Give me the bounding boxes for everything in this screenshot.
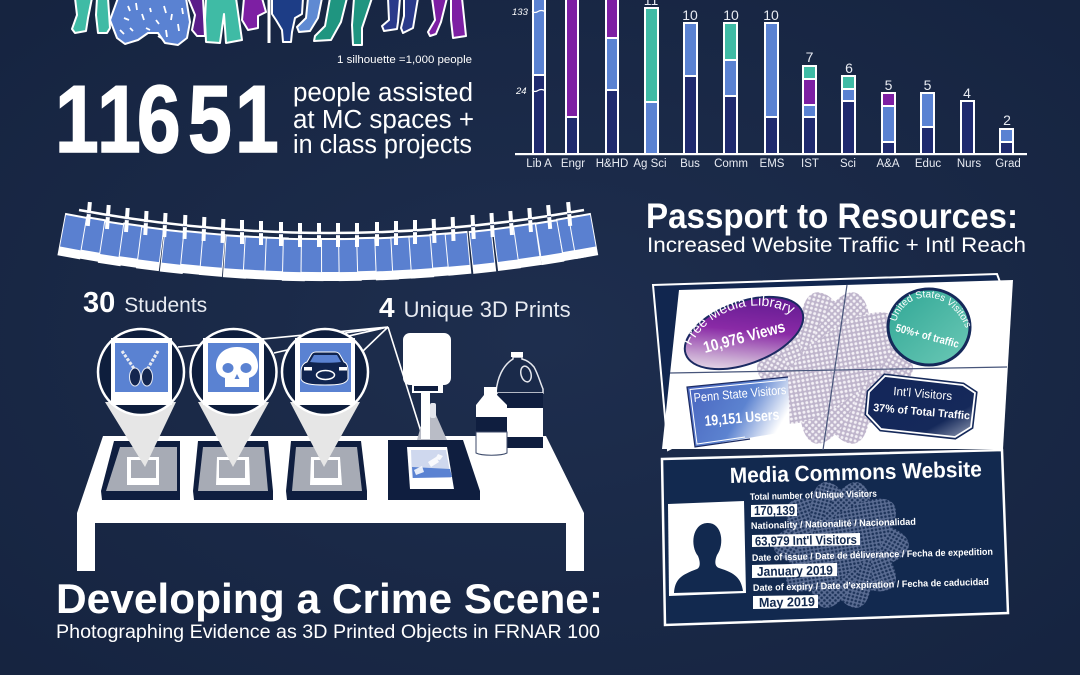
bar: Nurs: [961, 101, 974, 154]
side knob: [430, 403, 436, 418]
field: date of expiry: [753, 577, 989, 610]
field: date of expiry: May 2019: [759, 594, 815, 610]
bar: H&HD: [606, 0, 618, 154]
value labels: 7: [806, 49, 814, 65]
resin jug: [496, 352, 543, 448]
value labels: 2: [1003, 112, 1011, 128]
category labels: Grad: [995, 158, 1021, 170]
guilloche pattern lower: [771, 476, 911, 614]
identity page: [662, 450, 1008, 625]
silhouette: person with cane: [269, 0, 303, 43]
table top and legs: [77, 436, 584, 571]
30 students label: 30 Students: [83, 287, 207, 319]
chemical bottle: [476, 387, 507, 455]
icon: skull: [216, 347, 258, 387]
fold lines: [670, 285, 1007, 450]
rope: [79, 210, 584, 233]
category labels: EMS: [760, 158, 785, 170]
upper page: [662, 280, 1013, 449]
sticker: united states visitors: [886, 288, 972, 366]
silhouette: light blue leg: [297, 0, 322, 32]
bar: Sci: [842, 76, 855, 154]
field: date of issue: January 2019: [757, 563, 833, 579]
break values: 133: [512, 7, 529, 18]
bar: Engr: [566, 0, 578, 154]
tray 1: [101, 441, 180, 500]
magnifier: car: [282, 329, 368, 467]
category labels: Educ: [915, 158, 941, 170]
passport subheading: Increased Website Traffic + Intl Reach: [647, 234, 1026, 257]
field: unique visitors: [750, 489, 877, 518]
silhouettes of people: [72, 0, 466, 45]
light beam: [417, 415, 447, 440]
bar: Ag Sci: [645, 8, 658, 154]
value labels: [644, 0, 1011, 128]
sticker: international visitors: 37% of Total Traffic: [873, 402, 970, 422]
clothespins: [86, 202, 572, 247]
value labels: 10: [763, 7, 779, 23]
value labels: 5: [924, 77, 932, 93]
tray 2: [193, 441, 273, 500]
field: nationality: [751, 517, 916, 548]
category labels: Lib A: [526, 158, 552, 170]
stacked bar chart by college: [512, 0, 1027, 170]
passport heading: Passport to Resources:: [646, 197, 1018, 236]
field: nationality: 63,979 Int'l Visitors: [755, 533, 857, 548]
field: date of issue: Date of issue / Date de déliverance / Fecha de expedition: [752, 547, 993, 564]
bar: A&A: [882, 93, 895, 154]
print head: [412, 384, 443, 393]
value labels: 10: [723, 7, 739, 23]
icon: car: [301, 352, 348, 385]
passport illustration: [652, 273, 1013, 626]
silhouette: purple figure partly hidden: [188, 0, 205, 36]
sticker: penn state visitors: 19,151 Users: [704, 407, 780, 430]
value labels: 4: [963, 85, 971, 101]
category labels: Engr: [561, 158, 585, 170]
page title: Media Commons Website: [729, 456, 982, 488]
icon: dog tags: [122, 351, 158, 386]
photos: [57, 213, 598, 281]
magnifier: skull: [190, 329, 276, 467]
category labels: [526, 158, 1021, 170]
sticker: united states visitors: 50%+ of traffic: [894, 322, 960, 351]
guilloche pattern upper: [755, 285, 915, 451]
field: unique visitors: 170,139: [754, 504, 795, 518]
sticker: free media library: [684, 296, 804, 370]
sticker: free media library: 10,976 Views: [702, 319, 787, 357]
sticker: international visitors: [867, 376, 975, 437]
bar: EMS: [765, 23, 778, 154]
bar: IST: [803, 66, 816, 154]
value labels: 6: [845, 60, 853, 76]
category labels: Comm: [714, 158, 748, 170]
category labels: Ag Sci: [633, 158, 667, 170]
field: nationality: Nationality / Nationalité / Nacionalidad: [751, 517, 916, 532]
category labels: IST: [801, 158, 819, 170]
break values: [512, 7, 529, 97]
sticker: united states visitors: United States Visitors: [890, 290, 970, 328]
sticker: penn state visitors: Penn State Visitors: [693, 383, 787, 405]
field: date of issue: [752, 547, 993, 579]
tray 4 with print in progress: [388, 440, 480, 500]
crime scene heading: Developing a Crime Scene:: [56, 575, 603, 622]
value labels: 10: [682, 7, 698, 23]
printer body: [403, 333, 451, 385]
scale note: 1 silhouette =1,000 people: [337, 54, 472, 66]
people assisted description: [293, 79, 474, 159]
value labels: 5: [885, 77, 893, 93]
big number 11651: 11651: [55, 66, 279, 173]
field: unique visitors: Total number of Unique Visitors: [750, 489, 877, 503]
silhouette: wheelchair user: [110, 0, 190, 45]
category labels: Sci: [840, 158, 856, 170]
category labels: H&HD: [596, 158, 628, 170]
axis line: [515, 153, 1027, 155]
table with trays: [77, 436, 584, 571]
bar: Grad: [1000, 129, 1013, 154]
silhouette: purple boots: [428, 0, 466, 38]
4 unique 3D prints label: 4 Unique 3D Prints: [379, 292, 571, 323]
sticker: international visitors: Int'l Visitors: [893, 384, 953, 403]
silhouette: navy legs: [382, 0, 418, 33]
bar: Educ: [921, 93, 934, 154]
category labels: Bus: [680, 158, 700, 170]
passport cover: [653, 274, 1000, 450]
crime scene subheading: Photographing Evidence as 3D Printed Objects in FRNAR 100: [56, 622, 600, 643]
people assisted description: at MC spaces +: [293, 106, 474, 134]
break values: 24: [515, 86, 527, 97]
silhouette: green striding legs: [314, 0, 372, 45]
3D printer: [403, 333, 451, 440]
people assisted description: people assisted: [293, 79, 473, 107]
axis break marks: [532, 10, 545, 92]
silhouette: teal legs: [72, 0, 110, 33]
silhouette: purple skirt: [242, 0, 266, 30]
stem: [421, 392, 430, 439]
clothesline of student photos: [57, 202, 598, 281]
field: date of expiry: Date of expiry / Date d'expiration / Fecha de caducidad: [753, 577, 989, 594]
silhouette: teal trousers: [205, 0, 242, 43]
connector lines from photos to printer: [178, 327, 423, 438]
bar: Comm: [724, 23, 737, 154]
magnifier: dog tags: [98, 329, 184, 467]
portrait photo: [668, 501, 746, 596]
sticker: penn state visitors: [687, 377, 790, 447]
tray 3: [286, 441, 367, 500]
bar: Bus: [684, 23, 697, 154]
bar: Lib A: [533, 0, 545, 154]
category labels: A&A: [876, 158, 900, 170]
sticker: free media library: Free Media Library: [685, 296, 795, 345]
people assisted description: in class projects: [293, 131, 472, 159]
category labels: Nurs: [957, 158, 981, 170]
